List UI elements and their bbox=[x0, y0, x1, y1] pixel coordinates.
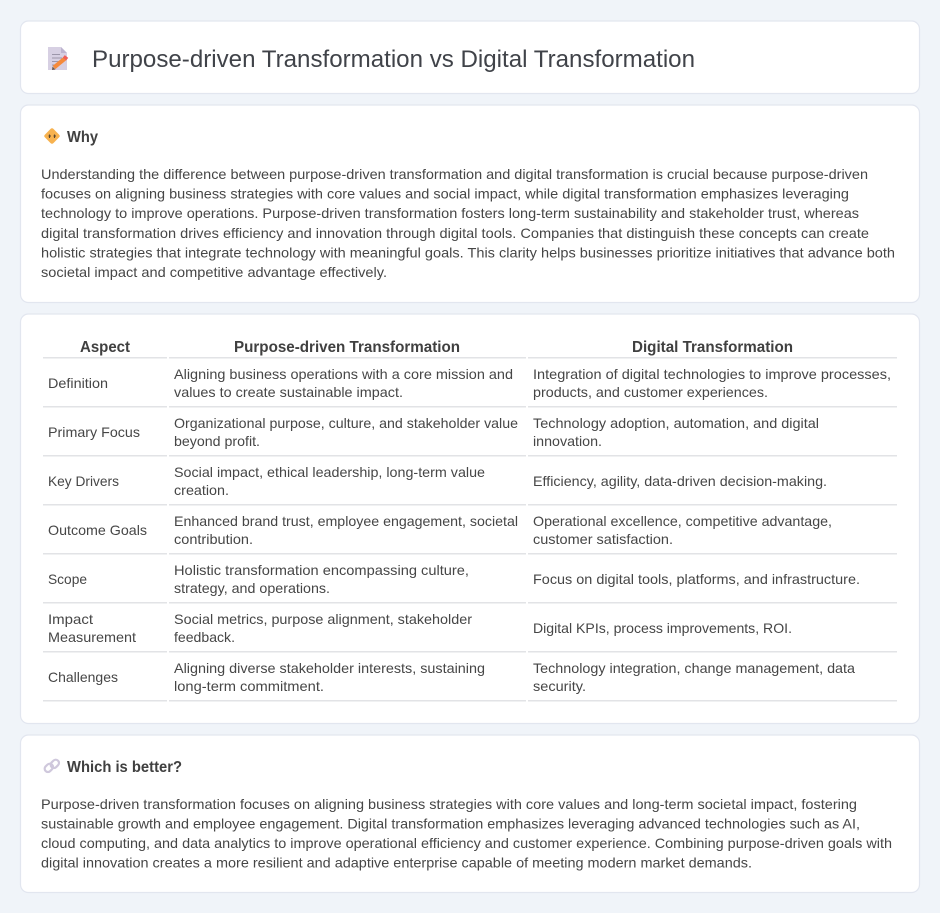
text block: verdict paragraph: cloud computing, and data analytics to improve operational efficiency and customer experience. Combining purpose-driven goals with bbox=[41, 835, 892, 851]
row: scope: Scope bbox=[48, 571, 87, 587]
panel: title header bbox=[20, 21, 920, 94]
title: Purpose-driven Transformation vs Digital Transformation bbox=[92, 46, 695, 73]
row: scope: Focus on digital tools, platforms, and infrastructure. bbox=[533, 571, 860, 587]
text block: verdict paragraph: Purpose-driven transformation focuses on aligning business strategies with core values and long-term societal impact, fostering bbox=[41, 796, 857, 812]
row: outcome goals: customer satisfaction. bbox=[533, 531, 673, 547]
table header row bbox=[80, 339, 793, 356]
row: scope: strategy, and operations. bbox=[174, 580, 330, 596]
text block: verdict paragraph bbox=[41, 796, 892, 870]
table header row: Purpose-driven Transformation bbox=[234, 339, 460, 356]
row: definition bbox=[48, 366, 891, 400]
row: definition: Integration of digital technologies to improve processes, bbox=[533, 366, 891, 382]
heading: which is better: Which is better? bbox=[67, 759, 182, 776]
row: scope: Holistic transformation encompassing culture, bbox=[174, 562, 469, 578]
row: challenges: Challenges bbox=[48, 669, 118, 685]
row: outcome goals: Outcome Goals bbox=[48, 522, 147, 538]
row: primary focus: Organizational purpose, culture, and stakeholder value bbox=[174, 415, 518, 431]
row: definition: products, and customer experiences. bbox=[533, 384, 768, 400]
row: primary focus: beyond profit. bbox=[174, 433, 260, 449]
panel: why bbox=[20, 105, 920, 302]
icon: document with pencil bbox=[48, 47, 67, 70]
row: key drivers bbox=[48, 464, 827, 498]
row: key drivers: Key Drivers bbox=[48, 473, 119, 489]
row: challenges: long-term commitment. bbox=[174, 678, 324, 694]
text block: why paragraph: Understanding the difference between purpose-driven transformation and digital transformation is crucial because purpose-driven bbox=[41, 166, 868, 182]
row: key drivers: creation. bbox=[174, 482, 229, 498]
text block: why paragraph: digital transformation drives efficiency and innovation through digital tools. Companies that distinguish these concepts can create bbox=[41, 225, 869, 241]
row: challenges bbox=[48, 660, 855, 694]
row: challenges: security. bbox=[533, 678, 586, 694]
panel: comparison table bbox=[20, 314, 920, 724]
row: impact measurement: Digital KPIs, process improvements, ROI. bbox=[533, 620, 792, 636]
row: scope bbox=[48, 562, 860, 596]
row: primary focus: innovation. bbox=[533, 433, 602, 449]
row: outcome goals: contribution. bbox=[174, 531, 253, 547]
row: primary focus: Primary Focus bbox=[48, 424, 140, 440]
table header row: Digital Transformation bbox=[632, 339, 793, 356]
row: impact measurement bbox=[48, 611, 792, 645]
row: outcome goals: Operational excellence, competitive advantage, bbox=[533, 513, 832, 529]
panel: which is better bbox=[20, 735, 920, 892]
row: primary focus bbox=[48, 415, 819, 449]
text block: why paragraph: technology to improve operations. Purpose-driven transformation fosters long-term sustainability and stakeholder trust, whereas bbox=[41, 205, 859, 221]
row: impact measurement: feedback. bbox=[174, 629, 235, 645]
row: outcome goals: Enhanced brand trust, employee engagement, societal bbox=[174, 513, 518, 529]
heading: why: Why bbox=[67, 129, 98, 146]
text block: why paragraph: societal impact and competitive advantage effectively. bbox=[41, 264, 387, 280]
text block: why paragraph bbox=[41, 166, 895, 280]
row: primary focus: Technology adoption, automation, and digital bbox=[533, 415, 819, 431]
row: key drivers: Efficiency, agility, data-driven decision-making. bbox=[533, 473, 827, 489]
row: impact measurement: Measurement bbox=[48, 629, 136, 645]
row: definition: values to create sustainable impact. bbox=[174, 384, 403, 400]
row: definition: Definition bbox=[48, 375, 108, 391]
row: challenges: Technology integration, change management, data bbox=[533, 660, 855, 676]
table header row: Aspect bbox=[80, 339, 131, 356]
icon: road-sign diamond bbox=[44, 128, 60, 144]
text block: verdict paragraph: digital innovation creates a more resilient and adaptive enterprise capable of meeting modern market demands. bbox=[41, 854, 752, 870]
text block: verdict paragraph: sustainable growth and employee engagement. Digital transformation emphasizes leveraging advanced technologies such as AI, bbox=[41, 816, 860, 832]
row: impact measurement: Impact bbox=[48, 611, 93, 627]
text block: why paragraph: focuses on aligning business strategies with core values and social impact, while digital transformation emphasizes leveraging bbox=[41, 186, 849, 202]
row: outcome goals bbox=[48, 513, 832, 547]
text block: why paragraph: holistic strategies that integrate technology with meaningful goals. This clarity helps businesses prioritize initiatives that advance both bbox=[41, 244, 895, 260]
row: impact measurement: Social metrics, purpose alignment, stakeholder bbox=[174, 611, 472, 627]
icon: chain link bbox=[43, 758, 60, 773]
row: definition: Aligning business operations with a core mission and bbox=[174, 366, 513, 382]
row: key drivers: Social impact, ethical leadership, long-term value bbox=[174, 464, 485, 480]
row: challenges: Aligning diverse stakeholder interests, sustaining bbox=[174, 660, 485, 676]
